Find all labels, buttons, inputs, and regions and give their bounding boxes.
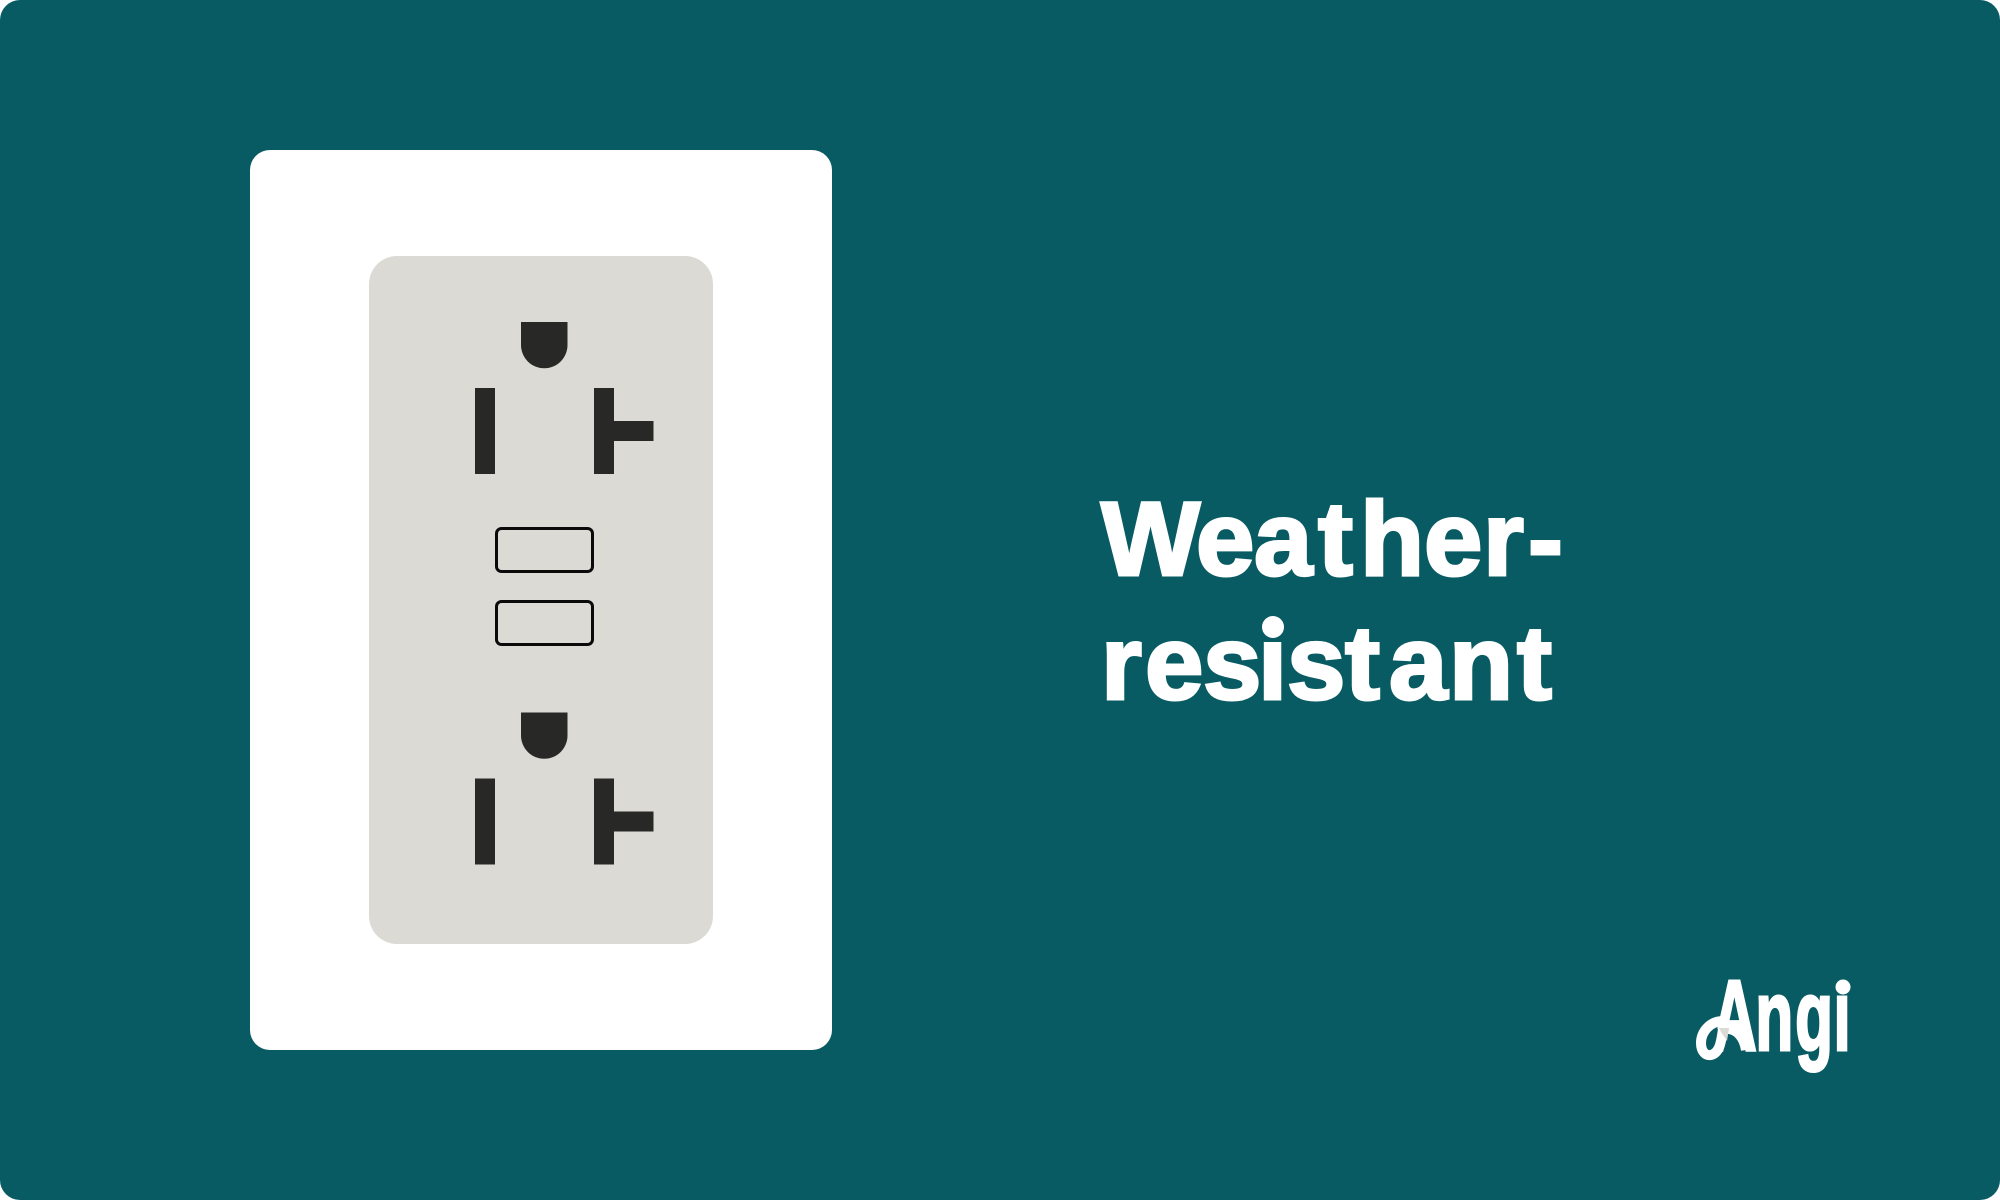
logo wordmark: Angi	[1712, 960, 1851, 1072]
Angi logo	[1701, 960, 1856, 1072]
top receptacle	[475, 322, 654, 474]
top hot T-slot	[594, 388, 654, 474]
logo swoosh	[1701, 1021, 1746, 1055]
top ground hole	[521, 322, 568, 368]
bottom receptacle	[475, 712, 654, 864]
test button	[496, 528, 592, 572]
bottom hot T-slot	[594, 778, 654, 864]
cover for square logo i dot	[1832, 970, 1856, 993]
outlet cover plate	[250, 150, 832, 1050]
top neutral slot	[475, 388, 495, 474]
bottom neutral slot	[475, 778, 495, 864]
reset button	[496, 602, 592, 644]
round i dot	[1262, 616, 1284, 638]
title line 2: resistant	[1101, 605, 1552, 722]
cover for A left foot	[1704, 1029, 1722, 1053]
title line 1: Weather-	[1101, 481, 1563, 598]
bottom ground hole	[521, 712, 568, 759]
round logo i dot	[1836, 980, 1850, 994]
title	[1101, 481, 1563, 722]
cover for square i dot	[1256, 612, 1288, 640]
outlet face	[369, 256, 713, 944]
logo swoosh highlight	[1719, 1028, 1729, 1041]
outlet illustration	[250, 150, 832, 1050]
